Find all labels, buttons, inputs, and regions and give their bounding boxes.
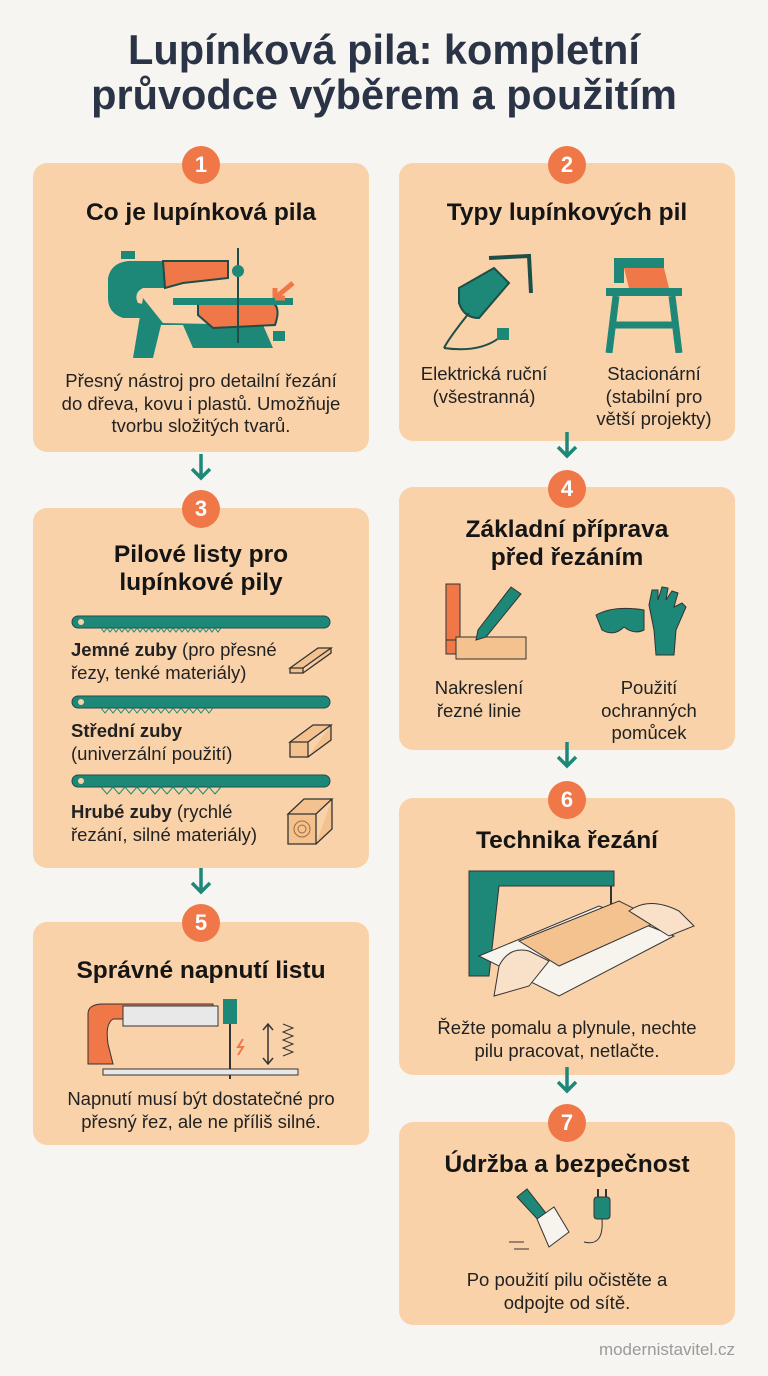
text 1: do dřeva, kovu i plastů. Umožňuje <box>62 392 340 414</box>
text 5: Napnutí musí být dostatečné pro <box>67 1088 335 1109</box>
panel: 1 Co je lupinkova pila <box>33 163 369 452</box>
blade 1 <box>72 616 330 633</box>
text: elektricka rucni: (všestranná) <box>433 386 535 406</box>
heading 7: Údržba a bezpečnost <box>444 1151 690 1178</box>
badge 2 <box>548 146 586 184</box>
panel: 2 Typy <box>399 163 735 441</box>
badge 6 <box>548 781 586 819</box>
text 6 <box>437 1017 697 1061</box>
panel: 7 Udrzba <box>399 1122 735 1325</box>
heading 6: Technika řezání <box>476 827 658 854</box>
footer: modernistavitel.cz <box>599 1340 735 1359</box>
icon: brush and plug <box>509 1188 610 1250</box>
text: jemne zuby: Jemné zuby (pro přesné <box>71 639 277 660</box>
text: elektricka rucni: Elektrická ruční <box>421 363 547 384</box>
heading 4: Základní příprava <box>466 516 668 543</box>
badge 6: 6 <box>561 787 573 812</box>
badge 7: 7 <box>561 1110 573 1135</box>
text 7: Po použití pilu očistěte a <box>467 1269 667 1290</box>
title: Lupínková pila: kompletní <box>128 26 640 73</box>
title: průvodce výběrem a použitím <box>91 71 677 118</box>
text: stredni zuby: (univerzální použití) <box>71 742 232 764</box>
text: pouziti ochrannych: Použití <box>621 677 677 698</box>
text: hrube zuby <box>71 801 257 845</box>
badge 4 <box>548 470 586 508</box>
text: jemne zuby <box>71 639 277 683</box>
heading 4 <box>466 516 669 571</box>
icon: goggles and gloves <box>595 586 687 656</box>
text: hrube zuby: řezání, silné materiály) <box>71 824 257 844</box>
badge 1 <box>182 146 220 184</box>
blade 2 <box>72 696 330 714</box>
text 6: pilu pracovat, netlačte. <box>474 1040 660 1060</box>
text: stacionarni: větší projekty) <box>596 408 712 429</box>
text: nakresleni: Nakreslení <box>435 677 523 698</box>
blade 3 <box>72 774 330 795</box>
arrow 3 to 5 <box>190 868 212 894</box>
panel: 6 Technika rezani <box>399 798 735 1075</box>
panel: 5 Spravne napnuti <box>33 922 369 1145</box>
icon: scroll saw <box>108 248 294 358</box>
text 5 <box>67 1088 335 1132</box>
panel: 4 Zakladni priprava <box>399 487 735 750</box>
text 1: Přesný nástroj pro detailní řezání <box>65 370 337 391</box>
panel: 3 Pilove listy <box>33 508 369 868</box>
text: stacionarni: (stabilní pro <box>606 386 702 406</box>
badge 5 <box>182 904 220 942</box>
badge 3 <box>182 490 220 528</box>
text: elektricka rucni <box>421 363 548 407</box>
text: pouziti ochrannych <box>601 677 697 743</box>
text: stredni zuby <box>71 720 232 764</box>
badge 7 <box>548 1104 586 1142</box>
text 1 <box>62 370 340 436</box>
heading 3 <box>114 541 288 596</box>
arrow 6 to 7 <box>556 1067 578 1094</box>
text: pouziti ochrannych: pomůcek <box>611 722 687 743</box>
heading 1: Co je lupínková pila <box>86 199 316 226</box>
badge 4: 4 <box>561 476 573 501</box>
arrow 1 to 3 <box>190 454 212 480</box>
arrow 4 to 6 <box>556 742 578 768</box>
heading 5: Správné napnutí listu <box>76 957 326 984</box>
text: nakresleni <box>435 677 524 720</box>
badge 2: 2 <box>561 152 573 177</box>
icon: hands cutting <box>468 870 695 997</box>
icon: thin board <box>288 647 333 674</box>
icon: tension <box>88 999 298 1079</box>
icon: handheld saw <box>443 254 533 350</box>
text: stacionarni <box>596 363 712 429</box>
icon: medium board <box>288 724 333 758</box>
title <box>91 26 677 118</box>
badge 1: 1 <box>195 152 207 177</box>
badge 5: 5 <box>195 910 207 935</box>
icon: thick block <box>286 798 334 845</box>
icon: stationary saw <box>606 258 682 353</box>
text 7 <box>467 1269 668 1313</box>
text 6: Řežte pomalu a plynule, nechte <box>437 1017 697 1038</box>
text 7: odpojte od sítě. <box>504 1292 630 1312</box>
heading 3: Pilové listy pro <box>114 541 288 568</box>
heading 3: lupínkové pily <box>119 569 283 596</box>
text: stredni zuby: Střední zuby <box>71 720 182 741</box>
text: jemne zuby: řezy, tenké materiály) <box>71 662 246 682</box>
badge 3: 3 <box>195 496 207 521</box>
text 5: přesný řez, ale ne příliš silné. <box>81 1110 321 1132</box>
text: pouziti ochrannych: ochranných <box>601 700 697 720</box>
text: stacionarni: Stacionární <box>607 363 701 384</box>
heading 4: před řezáním <box>491 544 643 571</box>
text: nakresleni: řezné linie <box>437 700 521 720</box>
arrow 2 to 4 <box>556 432 578 458</box>
text 1: tvorbu složitých tvarů. <box>112 415 290 436</box>
text: hrube zuby: Hrubé zuby (rychlé <box>71 801 232 822</box>
icon: ruler and pencil <box>446 584 526 660</box>
heading 2: Typy lupínkových pil <box>447 199 687 226</box>
